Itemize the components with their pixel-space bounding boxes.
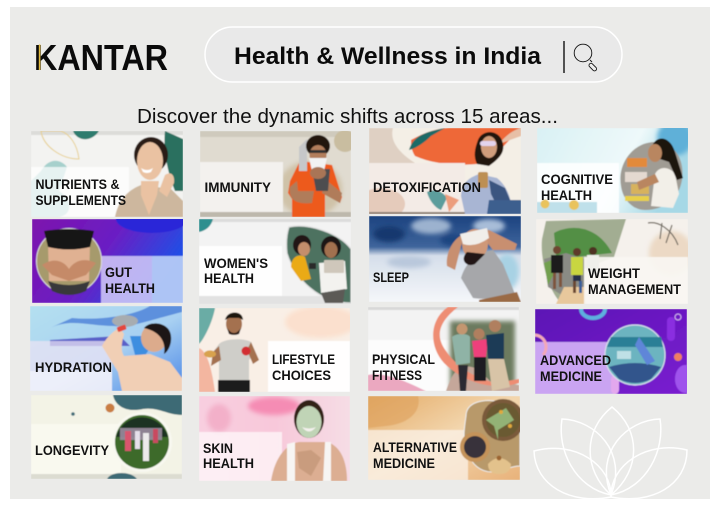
card: women's health bbox=[199, 219, 351, 304]
label: LIFESTYLE bbox=[272, 351, 335, 367]
label: SKIN bbox=[203, 440, 233, 456]
icon: search cursor and magnifier bbox=[564, 41, 597, 73]
card: skin health: HEALTH bbox=[203, 455, 254, 471]
subtitle: Discover the dynamic shifts across 15 areas... bbox=[137, 106, 558, 128]
icon: lotus outline bbox=[534, 407, 687, 499]
card: lifestyle choices: CHOICES bbox=[272, 367, 331, 383]
card: nutrients and supplements bbox=[31, 131, 183, 217]
label: WOMEN'S bbox=[204, 255, 268, 271]
label: GUT bbox=[105, 264, 132, 280]
label: ADVANCED bbox=[540, 352, 611, 368]
card: physical fitness: FITNESS bbox=[372, 367, 422, 383]
logo: Kantar: KANTAR bbox=[34, 37, 168, 78]
title: Health & Wellness in India bbox=[234, 43, 542, 70]
label: HYDRATION bbox=[35, 359, 112, 375]
card: gut health bbox=[32, 205, 188, 303]
card: longevity bbox=[31, 395, 182, 479]
label: NUTRIENTS & bbox=[36, 176, 120, 192]
card: detoxification bbox=[357, 128, 521, 220]
label: IMMUNITY bbox=[204, 179, 272, 195]
card: weight management bbox=[536, 219, 693, 304]
card: sleep bbox=[369, 216, 521, 302]
card: women's health: HEALTH bbox=[204, 270, 254, 286]
card: gut health: HEALTH bbox=[105, 280, 155, 296]
label: PHYSICAL bbox=[372, 351, 435, 367]
card: lifestyle choices bbox=[199, 306, 357, 392]
card: nutrients and supplements: SUPPLEMENTS bbox=[36, 192, 126, 208]
card: advanced medicine: MEDICINE bbox=[540, 368, 602, 384]
label: DETOXIFICATION bbox=[373, 179, 481, 195]
card: alternative medicine bbox=[368, 396, 524, 480]
label: ALTERNATIVE bbox=[373, 439, 457, 455]
card: weight management: MANAGEMENT bbox=[588, 281, 681, 297]
card: advanced medicine bbox=[535, 309, 695, 394]
label: COGNITIVE bbox=[541, 171, 613, 187]
card: skin health bbox=[199, 396, 350, 481]
card: physical fitness bbox=[368, 307, 519, 391]
card: cognitive health: HEALTH bbox=[541, 187, 592, 203]
card: hydration bbox=[30, 306, 182, 391]
label: WEIGHT bbox=[588, 265, 640, 281]
search bar title bbox=[205, 27, 622, 82]
card: immunity bbox=[200, 130, 356, 217]
label: SLEEP bbox=[373, 269, 409, 285]
card: cognitive health bbox=[537, 120, 693, 213]
card: alternative medicine: MEDICINE bbox=[373, 455, 435, 471]
label: LONGEVITY bbox=[35, 442, 110, 458]
